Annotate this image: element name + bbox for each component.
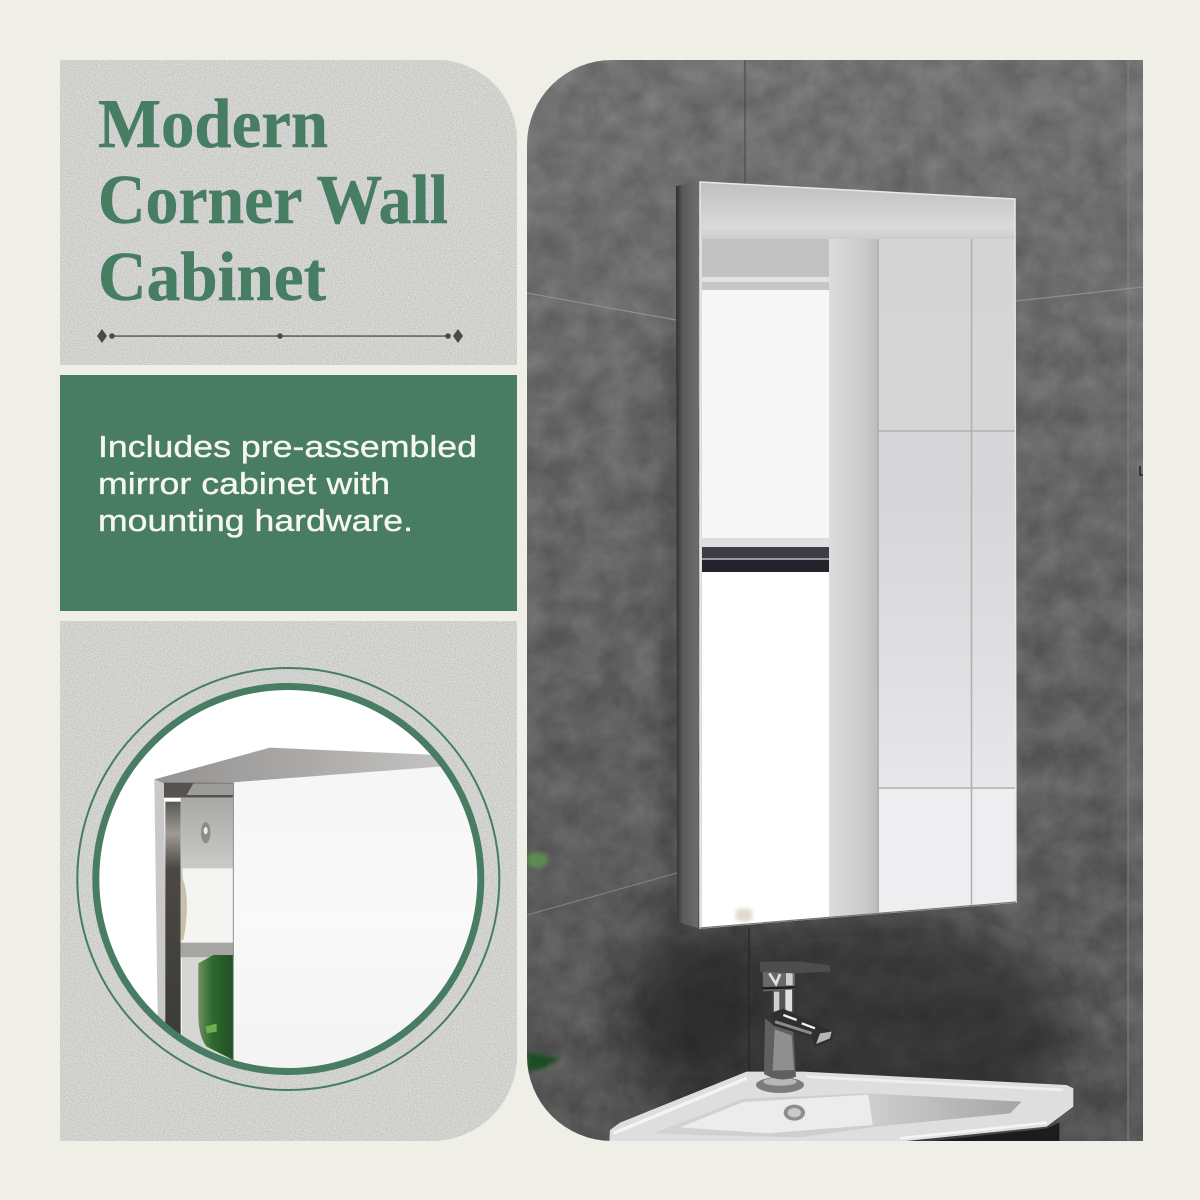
corner sink (609, 1072, 1073, 1142)
description background (60, 375, 517, 611)
basin rim (609, 1072, 1073, 1142)
vanity cabinet (927, 1123, 1059, 1142)
title panel background (60, 60, 517, 365)
description text: mirror cabinet with (98, 466, 390, 501)
title: Cabinet (98, 239, 326, 316)
mirror door (234, 766, 464, 1068)
title: Modern (98, 86, 328, 163)
cabinet top (154, 748, 450, 783)
panel: description (60, 375, 517, 611)
detail panel background (60, 621, 517, 1141)
reflected column (829, 238, 878, 938)
dark shading near basin (630, 915, 1070, 1165)
title (98, 86, 448, 316)
tiled wall (526, 60, 1143, 1165)
plant reflections (526, 852, 548, 868)
inner ring (96, 686, 481, 1072)
basin bowl (653, 1093, 1022, 1137)
panel: detail image (60, 621, 527, 1141)
reflected ceiling band (700, 180, 1018, 239)
description text (98, 429, 477, 538)
circular cabinet close-up (77, 668, 527, 1090)
panel: bathroom photo (526, 60, 1143, 1165)
reflected wall tiles (878, 238, 1018, 930)
ornamental divider (97, 329, 463, 343)
cabinet frame (154, 780, 166, 1022)
outer ring (77, 668, 499, 1090)
cabinet side panel (676, 181, 698, 928)
mirror (700, 180, 1018, 938)
panel: title (60, 60, 517, 365)
reflected window (702, 238, 830, 932)
description text: Includes pre-assembled (98, 429, 477, 464)
wall mark (1140, 466, 1143, 475)
description text: mounting hardware. (98, 503, 413, 538)
reflected flowers (735, 908, 753, 922)
cabinet interior (164, 783, 234, 1068)
faucet (756, 961, 833, 1093)
drain (784, 1105, 805, 1121)
title: Corner Wall (98, 162, 448, 239)
